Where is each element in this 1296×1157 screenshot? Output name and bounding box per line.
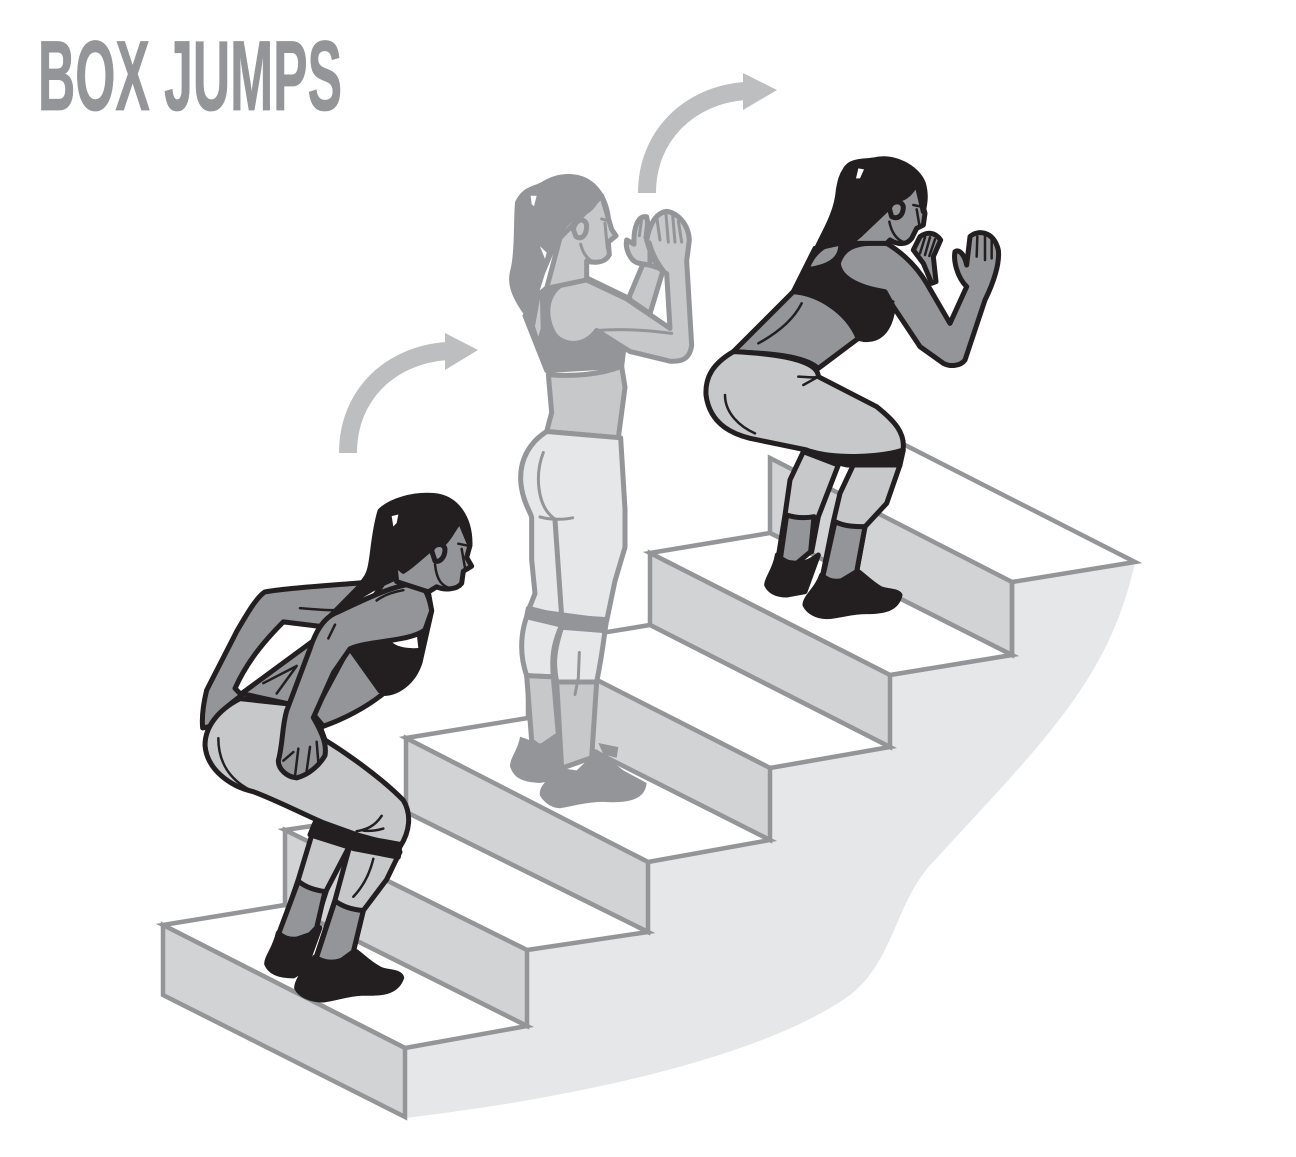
figure: crouching before jump: [202, 495, 472, 1000]
shadow under staircase: [405, 562, 1135, 1118]
staircase: [163, 440, 1135, 1117]
figure: landed on upper step: [706, 159, 999, 617]
title: BOX JUMPS: [38, 22, 342, 132]
arrow: second jump: [647, 73, 777, 193]
figure: standing mid-sequence (faded): [509, 174, 692, 808]
arrow: first jump: [348, 333, 478, 453]
